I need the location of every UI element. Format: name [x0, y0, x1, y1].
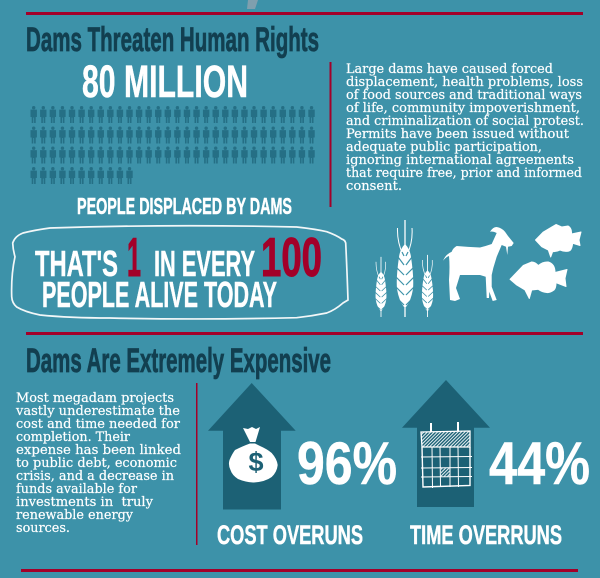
icon: calendar [421, 422, 472, 488]
vertical divider, lower [196, 383, 198, 545]
text block: megadam costs: investments in truly [16, 495, 154, 510]
text block: dam impacts: of food sources and traditional ways [346, 88, 582, 103]
text block: dam impacts: Permits have been issued without [346, 127, 570, 142]
text block: dam impacts: of life, community impoverishment, [346, 101, 580, 116]
text block: dam impacts: adequate public participation, [346, 140, 542, 155]
callout text line 1: 100 [261, 226, 322, 288]
arrow: cost [208, 383, 296, 510]
text block: dam impacts: ignoring international agreements [346, 153, 574, 168]
text block: megadam costs: Most megadam projects [16, 391, 174, 406]
middle red rule [26, 332, 583, 335]
text block: megadam costs: funds available for [16, 482, 138, 497]
title: Dams Are Extremely Expensive: Dams Are Extremely Expensive [26, 342, 331, 380]
vertical divider, upper [330, 62, 332, 207]
icon: fish, upper [536, 224, 581, 257]
icon: goat [443, 227, 514, 301]
text block: megadam costs [15, 391, 181, 536]
callout text line 2: PEOPLE ALIVE TODAY [42, 274, 277, 315]
label: cost overuns: COST OVERUNS [217, 520, 363, 550]
callout text line 1: THAT'S [35, 243, 118, 284]
icon: fish, lower [510, 262, 567, 298]
text block: megadam costs: sources. [16, 521, 70, 536]
headline: 80 million: 80 MILLION [82, 56, 248, 107]
text block: dam impacts: consent. [346, 179, 402, 194]
text block: megadam costs: crisis, and a decrease in [16, 469, 175, 484]
text block: megadam costs: expense has been linked [16, 443, 181, 458]
title: Dams Threaten Human Rights: Dams Threaten Human Rights [26, 21, 319, 59]
callout text line 1: IN EVERY [154, 243, 255, 284]
text block: megadam costs: cost and time needed for [16, 417, 181, 432]
text block: dam impacts: displacement, health problems, loss [346, 75, 583, 90]
text block: dam impacts: and criminalization of social protest. [346, 114, 584, 129]
text block: dam impacts [346, 62, 584, 194]
icon: wheat stalks [375, 220, 434, 317]
hand-drawn outline [12, 226, 348, 319]
icon: money bag: $ [248, 447, 264, 477]
arrow: time [402, 380, 490, 507]
bottom red rule [21, 569, 578, 572]
cropped grey figure at top edge [247, 0, 258, 9]
text block: dam impacts: that require free, prior and informed [346, 166, 582, 181]
callout: 1 in every 100 [12, 226, 348, 319]
callout text line 1 [35, 226, 322, 288]
pictogram: people displaced [30, 106, 315, 184]
text block: megadam costs: vastly underestimate the [15, 404, 180, 419]
text block: dam impacts: Large dams have caused forced [346, 62, 553, 77]
text block: megadam costs: to public debt, economic [16, 456, 177, 471]
callout text line 1: 1 [127, 226, 141, 288]
top red rule [26, 12, 583, 15]
icon: money bag [229, 427, 278, 482]
stat: 96 percent: 96% [297, 430, 397, 497]
text block: megadam costs: completion. Their [16, 430, 131, 445]
text block: megadam costs: renewable energy [16, 508, 134, 523]
caption: people displaced by dams: PEOPLE DISPLACED BY DAMS [77, 193, 292, 219]
